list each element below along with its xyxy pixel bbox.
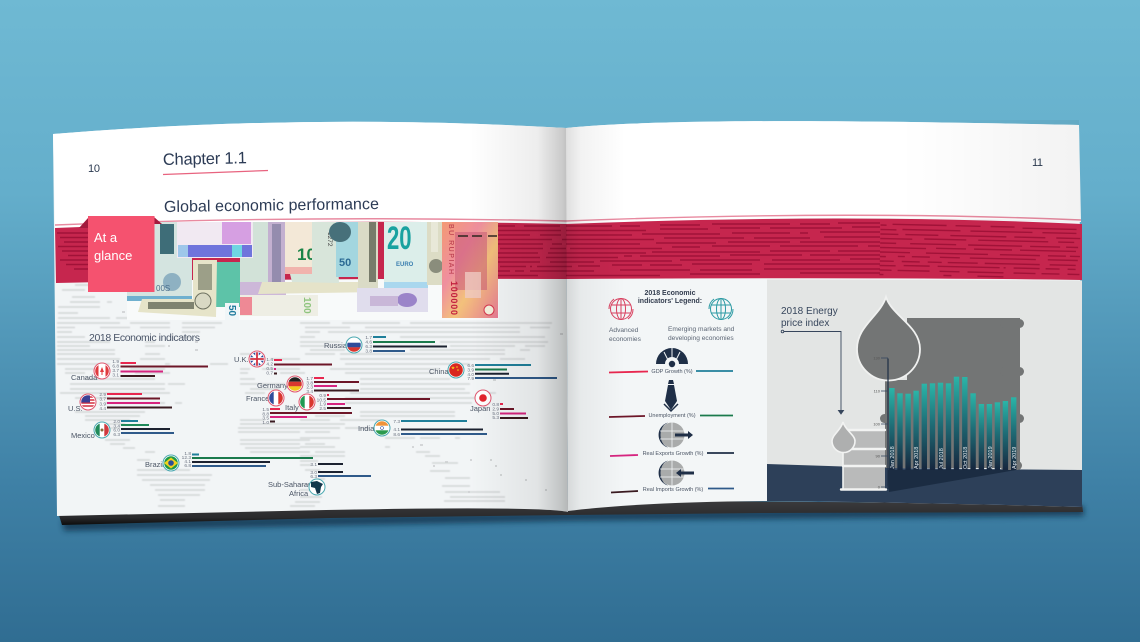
country: Italy: 1.9	[319, 402, 326, 408]
banknote: pale with red corner	[240, 295, 318, 316]
banknote: dollar right	[427, 222, 442, 285]
country: United Kingdom: 0.7	[266, 370, 273, 376]
country: India: 4.1	[393, 427, 400, 433]
energy bar chart	[889, 377, 1016, 470]
banknote: dollar dark	[358, 222, 378, 290]
country: United States: 4.4	[99, 406, 106, 412]
chart month labels: Apr 2019	[1012, 447, 1018, 469]
right page upper white area	[566, 121, 1081, 224]
banknote: rupiah: BU RUPIAH	[447, 224, 454, 274]
country: Russia: 4.6	[365, 340, 372, 346]
country: Canada	[71, 360, 208, 380]
icon: imports globe	[659, 460, 694, 486]
red band left	[55, 222, 566, 283]
country: United Kingdom: 1.4	[266, 357, 273, 363]
banknote: US dollar left	[138, 260, 217, 317]
region: Sub-Saharan Africa: Sub-Saharan	[268, 480, 312, 489]
legend row: unemployment	[609, 413, 733, 419]
icon: necktie	[664, 380, 678, 411]
chapter title: Chapter 1.1	[163, 149, 247, 169]
country: Japan: 5.3	[492, 415, 499, 421]
tag: at a glance	[79, 216, 162, 292]
chart axis: 90	[876, 454, 881, 458]
right page	[566, 121, 1082, 511]
country: China: 6.6	[467, 363, 474, 369]
floor shadow	[888, 470, 1016, 492]
banknote: lavender	[240, 222, 286, 296]
section heading: Global economic performance	[164, 196, 379, 216]
country: France: 1.5	[262, 407, 269, 413]
world map stripes	[57, 285, 552, 506]
country: France: 8.8	[262, 411, 269, 417]
pink line above right band	[566, 215, 1081, 221]
country: Canada: Canada	[71, 373, 98, 382]
banknote: violet bottom	[357, 288, 428, 312]
dark ground	[767, 464, 1082, 507]
country: Russia: 6.3	[365, 344, 372, 350]
country: Germany: 2.3	[306, 385, 313, 391]
legend title	[638, 290, 702, 305]
banknote: purple hologram	[177, 222, 253, 258]
country: France: 1.0	[262, 420, 269, 426]
chart axis	[873, 356, 888, 490]
country: India: India	[358, 424, 375, 433]
legend row: real imports	[611, 487, 734, 493]
country: Italy: Italy	[285, 403, 299, 412]
icon: GDP gauge	[656, 348, 688, 367]
chart month labels: Oct 2018	[963, 447, 969, 469]
region: Sub-Saharan Africa	[268, 462, 371, 498]
country: Canada: 1.9	[112, 359, 119, 365]
panel: energy price index	[767, 280, 1082, 507]
country: United States	[68, 393, 172, 411]
chart month labels: Apr 2018	[914, 447, 920, 469]
legend row: GDP growth	[609, 369, 733, 375]
panel title: 2018 Energy	[781, 306, 838, 317]
country: Brazil: 1.8	[184, 451, 191, 457]
red band right	[566, 218, 1082, 280]
country: France	[246, 390, 352, 426]
country: Germany: 1.7	[306, 376, 313, 382]
country: Italy	[285, 393, 430, 412]
small barrel	[841, 430, 886, 490]
legend text: advanced economies: Advanced	[609, 327, 639, 334]
region: Sub-Saharan Africa: 3.0	[310, 470, 317, 476]
country: Italy: 10.5	[317, 397, 326, 403]
chapter title	[163, 149, 268, 174]
country: China: 7.9	[467, 376, 474, 382]
chart axis: 110	[874, 388, 881, 394]
legend title: indicators' Legend:	[638, 298, 702, 305]
country: Mexico: 6.3	[113, 432, 120, 438]
country: Canada: 6.8	[112, 364, 119, 370]
legend row: GDP growth: GDP Growth (%)	[651, 369, 693, 375]
country: Russia: 1.7	[365, 335, 372, 341]
left page upper white area	[53, 122, 566, 228]
country: China: China	[429, 367, 449, 376]
legend text: emerging markets: Emerging markets and	[668, 326, 735, 333]
country: Japan: 0.8	[492, 402, 499, 408]
legend text: emerging markets: developing economies	[668, 335, 734, 342]
legend row: real imports: Real Imports Growth (%)	[643, 487, 703, 493]
chart month labels	[890, 446, 1018, 469]
region: Sub-Saharan Africa: 6.3	[310, 474, 317, 480]
country: China: 4.0	[467, 372, 474, 378]
chart month labels: Jan 2019	[988, 446, 994, 469]
country: Mexico: 2.0	[113, 419, 120, 425]
legend row: unemployment: Unemployment (%)	[648, 413, 696, 419]
country: Germany: Germany	[257, 381, 288, 390]
chart month labels: Jan 2018	[890, 446, 896, 469]
country: Canada: 3.7	[112, 368, 119, 374]
legend row: real exports	[610, 451, 734, 457]
legend text: advanced economies: economies	[609, 336, 642, 343]
legend row: real exports: Real Exports Growth (%)	[643, 451, 704, 457]
country: Mexico	[72, 420, 174, 438]
country: Italy: 2.5	[319, 406, 326, 412]
pink line above band	[55, 219, 566, 225]
country: China	[429, 362, 557, 382]
country: Mexico: Mexico	[71, 431, 95, 440]
country: Japan	[470, 390, 528, 421]
country: Russia	[324, 336, 447, 354]
banknote: teal	[216, 262, 240, 307]
book page edge	[58, 500, 1083, 525]
banknote: pale green left: 00S	[156, 284, 170, 293]
country: Mexico: 3.4	[113, 423, 120, 429]
tag: at a glance: glance	[94, 248, 132, 263]
book shadow	[62, 506, 1084, 531]
country: United States: 3.9	[99, 401, 106, 407]
country: Japan: 5.0	[492, 411, 499, 417]
page number 10: 10	[88, 163, 100, 175]
country: Canada: 3.1	[112, 372, 119, 378]
map title: 2018 Economic indicators	[89, 332, 200, 344]
icon: advanced economies globe	[609, 298, 633, 320]
country: United Kingdom	[234, 351, 332, 376]
money collage	[127, 220, 499, 320]
banknote: euro 50 strip: 50	[226, 305, 237, 317]
panel title: price index	[781, 318, 829, 329]
banknote: blue fifty	[329, 222, 360, 277]
banknote: euro 50 strip	[225, 303, 239, 316]
banknote: rupiah	[442, 222, 498, 318]
country: China: 3.9	[467, 367, 474, 373]
country: Germany: 3.4	[306, 389, 313, 395]
small oil drop	[832, 422, 855, 453]
page shading	[53, 122, 568, 516]
icon: emerging markets globe	[709, 298, 733, 320]
big barrel	[880, 318, 1024, 470]
map dots	[122, 312, 563, 492]
country: Germany: 3.8	[306, 380, 313, 386]
big drop	[857, 297, 920, 381]
tag: at a glance: At a	[94, 230, 118, 245]
country: France: France	[246, 394, 269, 403]
banknote: serial note: 1272	[326, 232, 333, 247]
chart axis: 130	[873, 356, 881, 360]
country: United States: U.S.	[68, 404, 83, 413]
banknote: ten: 10	[297, 245, 316, 264]
banknote: euro twenty: EURO	[396, 262, 414, 268]
country: India: 7.3	[393, 419, 400, 425]
callout arrow	[781, 330, 844, 414]
country: United Kingdom: 4.2	[266, 362, 273, 368]
country: Brazil: 6.8	[184, 463, 191, 469]
country: Russia: Russia	[324, 341, 348, 350]
country: Russia: 3.8	[365, 348, 372, 354]
legend title: 2018 Economic	[645, 290, 696, 297]
banknote: serial note	[290, 222, 339, 283]
country: Italy: 0.9	[319, 393, 326, 399]
banknote: ten	[285, 222, 312, 274]
banknote: pale with red corner: 100	[301, 297, 312, 314]
country: Japan: 2.9	[492, 406, 499, 412]
banknote: pale green centre	[240, 222, 270, 282]
country: Brazil: Brazil	[145, 460, 164, 469]
banknote: dollar base	[258, 282, 358, 294]
country: Mexico: 6.0	[113, 428, 120, 434]
chart axis: 100	[873, 422, 881, 426]
left page	[53, 122, 568, 516]
country: Brazil: 4.1	[184, 459, 191, 465]
country: India: 8.6	[393, 432, 400, 438]
country: United Kingdom: 0.5	[266, 366, 273, 372]
banknote: euro twenty: 20	[387, 220, 412, 256]
banknote: pale green left	[127, 222, 192, 301]
banknote: blue fifty: 50	[339, 257, 351, 269]
country: Brazil	[145, 451, 313, 471]
region: Sub-Saharan Africa: Africa	[289, 489, 309, 498]
country: India	[358, 420, 487, 436]
banknote: rupiah: 100000	[449, 281, 459, 315]
country: France: 3.5	[262, 416, 269, 422]
country: United States: 2.9	[99, 392, 106, 398]
region: Sub-Saharan Africa: 3.1	[310, 462, 317, 468]
chart month labels: Jul 2018	[939, 448, 945, 469]
chart axis: 0	[878, 484, 881, 490]
icon: exports globe	[659, 422, 693, 448]
country: United States: 3.7	[99, 397, 106, 403]
country: Brazil: 12.3	[182, 455, 191, 461]
banknote: euro twenty	[384, 220, 428, 288]
band stripes	[57, 223, 1081, 279]
country: United Kingdom: U.K.	[234, 355, 249, 364]
country: Germany	[257, 376, 359, 395]
page number 11: 11	[1032, 157, 1043, 169]
country: Japan: Japan	[470, 404, 490, 413]
